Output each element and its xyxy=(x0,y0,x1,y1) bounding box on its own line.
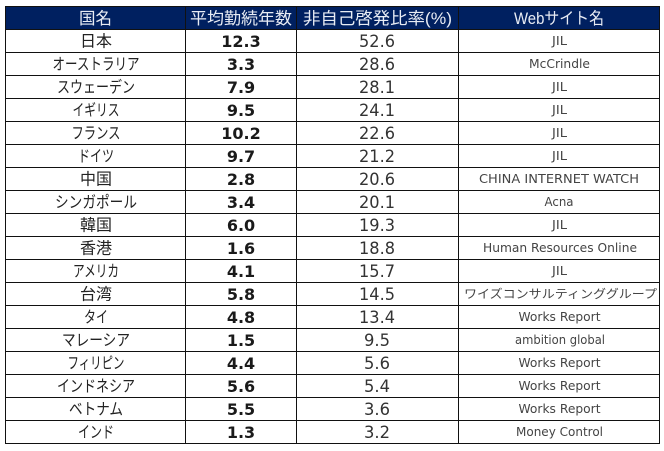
row: スウェーデン: 7.9 xyxy=(227,78,255,97)
row: 台湾: ワイズコンサルティンググループ xyxy=(464,286,657,301)
row: アメリカ: アメリカ xyxy=(73,264,119,280)
row: インド: Money Control xyxy=(516,425,603,439)
row: 韓国: 19.3 xyxy=(359,216,395,236)
row: スウェーデン: JIL xyxy=(551,80,567,94)
row: インド: インド xyxy=(78,424,114,442)
row: アメリカ xyxy=(73,262,567,282)
row: フィリピン xyxy=(68,354,601,374)
row: タイ xyxy=(84,308,601,328)
row: シンガポール: 3.4 xyxy=(227,193,255,212)
table header row: Webサイト名 xyxy=(514,9,604,28)
row: オーストラリア xyxy=(52,55,590,75)
row: フランス: 10.2 xyxy=(221,124,261,143)
row: インドネシア: 5.4 xyxy=(364,377,390,397)
row: 台湾: 5.8 xyxy=(227,285,255,304)
row: シンガポール: Acna xyxy=(544,195,574,209)
table header row: 非自己啓発比率(%) xyxy=(303,9,452,28)
row: 台湾: 14.5 xyxy=(359,285,395,305)
row: フィリピン: 4.4 xyxy=(227,354,255,373)
row: インドネシア: Works Report xyxy=(518,379,601,393)
row: マレーシア: マレーシア xyxy=(62,332,130,350)
row: ドイツ: 21.2 xyxy=(359,147,395,167)
row: 韓国: JIL xyxy=(551,218,567,232)
row: 中国: 中国 xyxy=(80,170,112,188)
row: イギリス: 9.5 xyxy=(227,101,255,120)
row: フィリピン: Works Report xyxy=(518,356,601,370)
row: フランス xyxy=(72,124,567,144)
row: 中国: 20.6 xyxy=(359,170,395,190)
row: 中国: 2.8 xyxy=(227,170,255,189)
row: シンガポール xyxy=(55,193,574,213)
row: ドイツ xyxy=(78,147,567,167)
row: ベトナム: Works Report xyxy=(518,402,601,416)
row: マレーシア: ambition global xyxy=(515,333,605,347)
row: 台湾 xyxy=(80,285,657,305)
row: 日本: 日本 xyxy=(80,32,112,50)
row: 香港: Human Resources Online xyxy=(483,241,637,255)
row: 日本: 12.3 xyxy=(221,32,261,51)
row: タイ: タイ xyxy=(84,308,108,326)
row: イギリス xyxy=(72,101,567,121)
row: オーストラリア: オーストラリア xyxy=(52,56,140,74)
row: フィリピン: フィリピン xyxy=(68,356,124,372)
row: 韓国 xyxy=(80,216,567,236)
row: ドイツ: JIL xyxy=(551,149,567,163)
row: シンガポール: 20.1 xyxy=(359,193,395,213)
row: 香港: 18.8 xyxy=(359,239,395,259)
row: ベトナム: 3.6 xyxy=(364,400,390,420)
row: フィリピン: 5.6 xyxy=(364,354,390,374)
row: アメリカ: JIL xyxy=(551,264,567,278)
row: スウェーデン: 28.1 xyxy=(359,78,395,98)
row: インドネシア: インドネシア xyxy=(57,378,135,396)
row: ドイツ: ドイツ xyxy=(78,148,114,166)
row: 中国: CHINA INTERNET WATCH xyxy=(479,172,639,186)
row: 韓国: 韓国 xyxy=(80,216,112,234)
table header row: 国名 xyxy=(79,9,112,28)
row: タイ: 4.8 xyxy=(227,308,255,327)
row: 日本: 52.6 xyxy=(359,32,395,52)
row: オーストラリア: 28.6 xyxy=(359,55,395,75)
table header row: 平均勤続年数 xyxy=(190,9,292,28)
row: インドネシア xyxy=(57,377,601,397)
table header row xyxy=(6,6,660,30)
row: フランス: フランス xyxy=(72,126,120,142)
row: 香港: 香港 xyxy=(80,240,112,258)
row: 香港 xyxy=(80,239,637,259)
row: 香港: 1.6 xyxy=(227,239,255,258)
row: イギリス: イギリス xyxy=(72,102,120,120)
row: 日本: JIL xyxy=(551,34,567,48)
row: インド: 3.2 xyxy=(364,423,390,443)
row: 台湾: 台湾 xyxy=(80,286,112,304)
row: フランス: JIL xyxy=(551,126,567,140)
row: フランス: 22.6 xyxy=(359,124,395,144)
row: マレーシア xyxy=(62,331,605,351)
row: オーストラリア: McCrindle xyxy=(529,57,590,71)
row: タイ: 13.4 xyxy=(359,308,395,328)
row: 日本 xyxy=(80,32,567,52)
row: シンガポール: シンガポール xyxy=(55,194,137,212)
row: スウェーデン xyxy=(57,78,567,98)
row: インドネシア: 5.6 xyxy=(227,377,255,396)
row: イギリス: 24.1 xyxy=(359,101,395,121)
row: アメリカ: 4.1 xyxy=(227,262,255,281)
row: アメリカ: 15.7 xyxy=(359,262,395,282)
row: ベトナム: ベトナム xyxy=(69,402,123,418)
row: ベトナム: 5.5 xyxy=(227,400,255,419)
row: イギリス: JIL xyxy=(551,103,567,117)
row: ベトナム xyxy=(69,400,601,420)
row: スウェーデン: スウェーデン xyxy=(57,78,135,96)
row: インド: 1.3 xyxy=(227,423,255,442)
row: マレーシア: 1.5 xyxy=(227,331,255,350)
row: ドイツ: 9.7 xyxy=(227,147,255,166)
row: 韓国: 6.0 xyxy=(227,216,255,235)
row: 中国 xyxy=(80,170,639,190)
row: インド xyxy=(78,423,603,443)
row: マレーシア: 9.5 xyxy=(364,331,390,351)
row: オーストラリア: 3.3 xyxy=(227,55,255,74)
row: タイ: Works Report xyxy=(518,310,601,324)
